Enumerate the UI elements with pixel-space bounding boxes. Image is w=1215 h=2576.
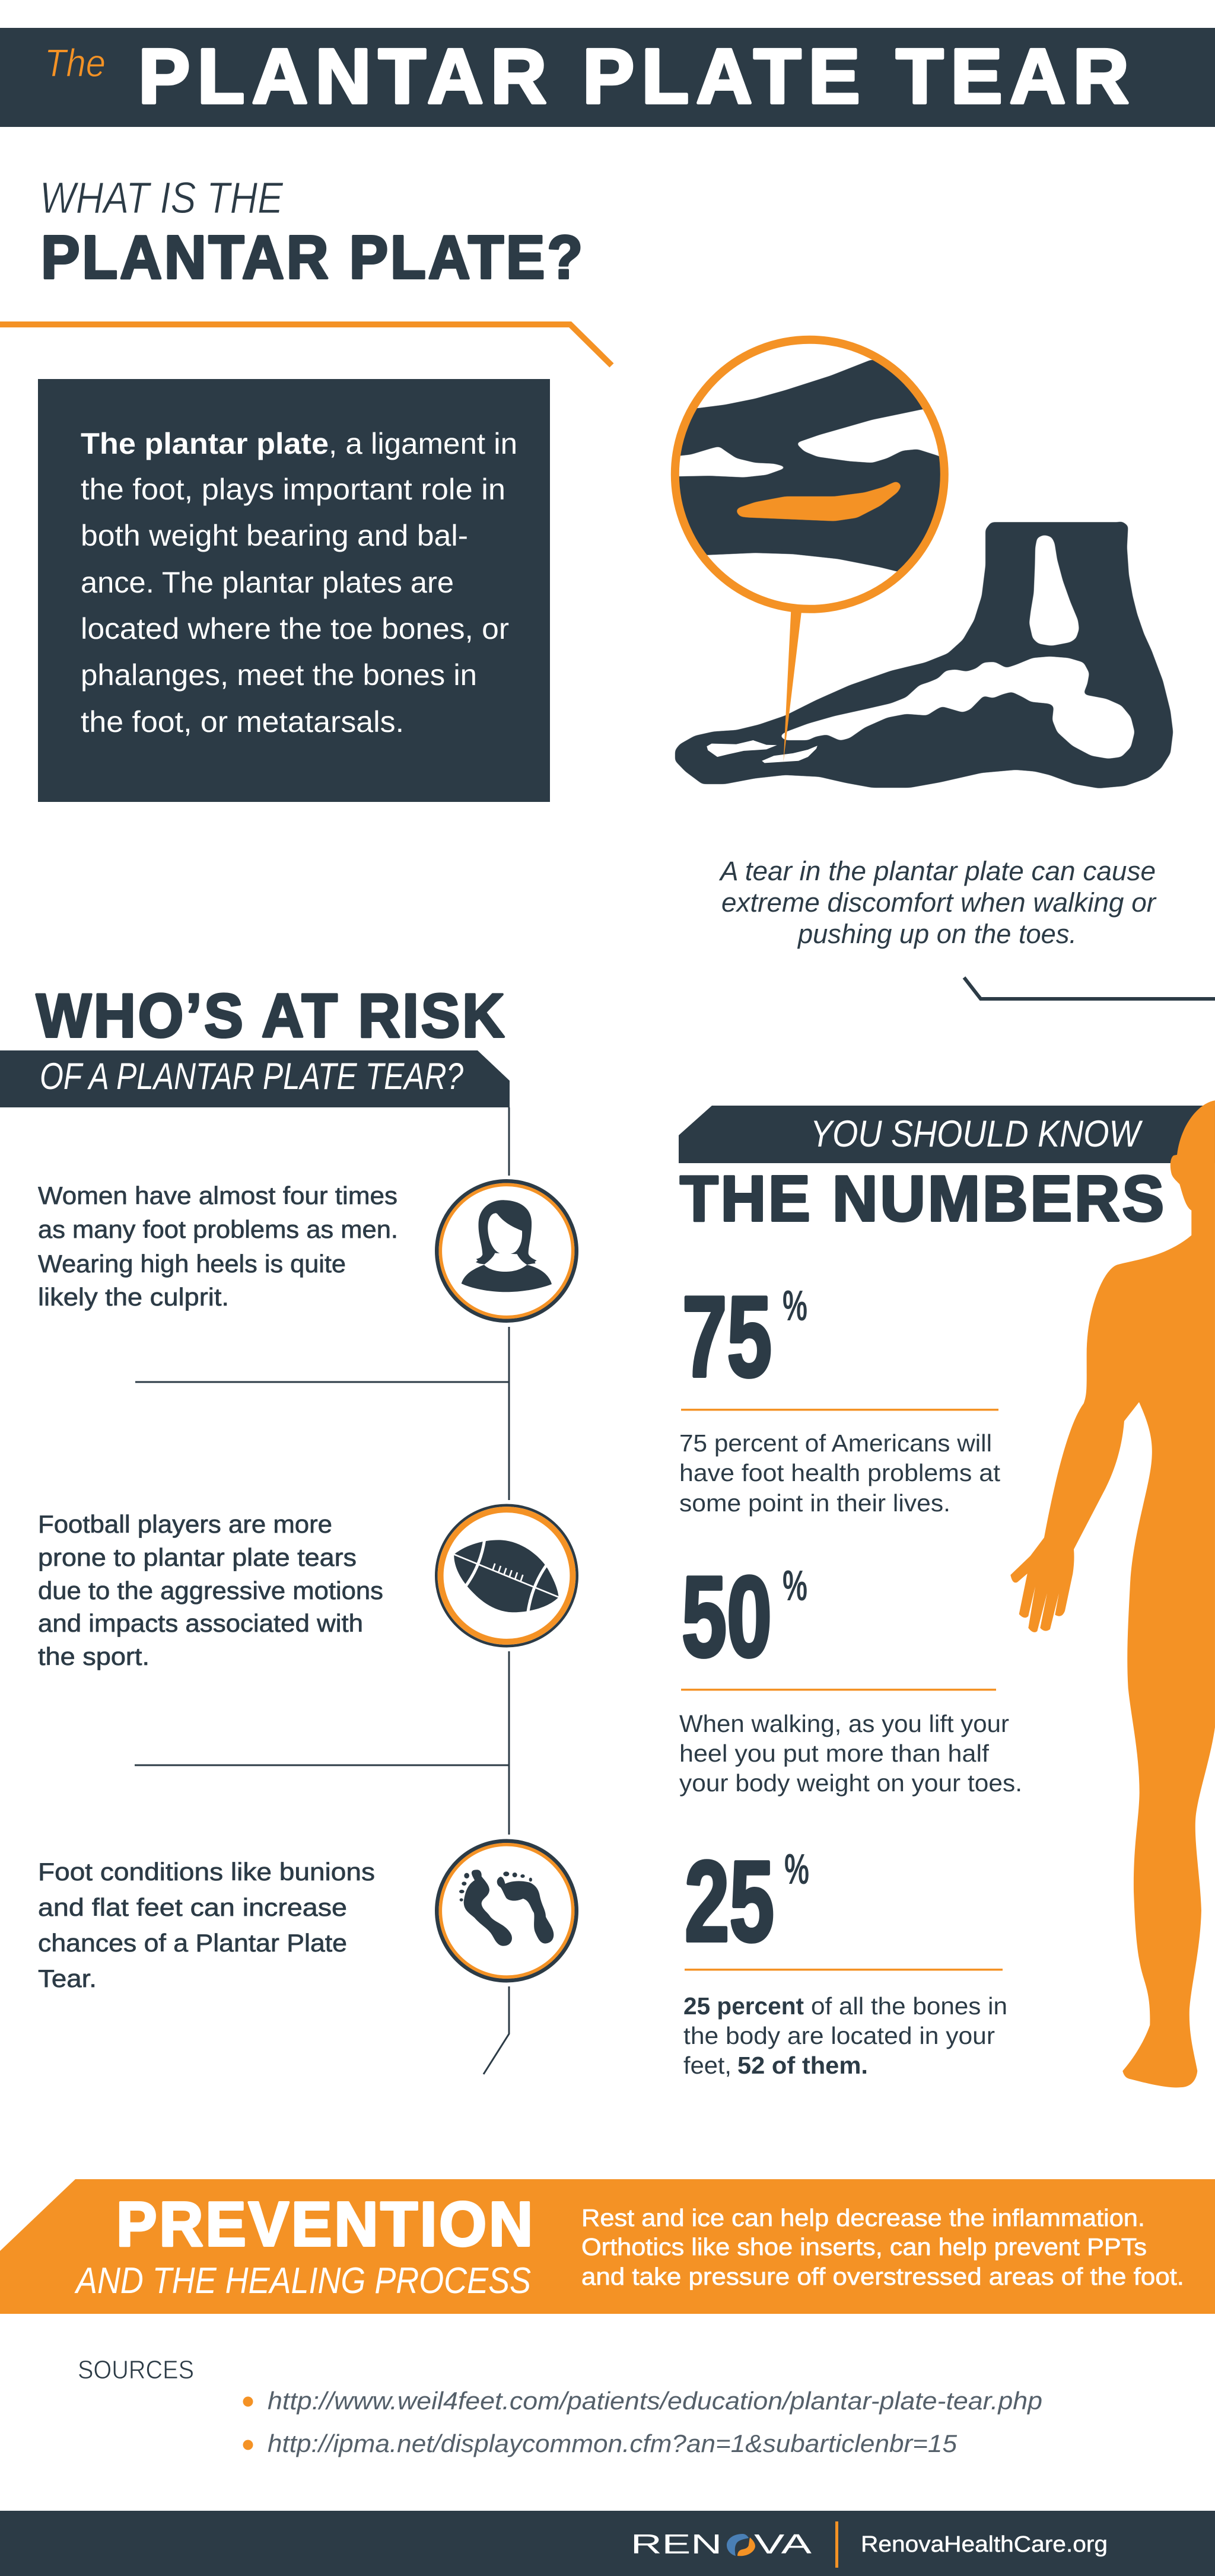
sources heading: SOURCES (78, 2355, 194, 2384)
stat: 50 percent: % (783, 1562, 807, 1610)
logo: Renova: REN (631, 2529, 722, 2559)
timeline connector (135, 1107, 509, 2074)
sources list (243, 2387, 1042, 2457)
subheading banner: you should know: YOU SHOULD KNOW (810, 1113, 1143, 1155)
stat: 25 percent: feet, (683, 2052, 731, 2079)
prevention text: Rest and ice can help decrease the inflammation. (581, 2204, 1145, 2231)
heading: the numbers: THE NUMBERS (680, 1163, 1166, 1235)
stat: 50 percent: When walking, as you lift your (679, 1710, 1009, 1737)
magnifier pointer (784, 611, 801, 762)
prevention subheading: AND THE HEALING PROCESS (74, 2260, 531, 2301)
risk text: football (38, 1510, 383, 1670)
risk text: football: prone to plantar plate tears (38, 1543, 357, 1571)
title prefix: The (44, 41, 106, 85)
magnifier ring (675, 340, 944, 609)
illustration: human body silhouette (1010, 1100, 1215, 2087)
definition text: ance. The plantar plates are (81, 566, 454, 599)
stat: 50 percent: your body weight on your toes. (679, 1769, 1022, 1797)
risk text: women: Women have almost four times (38, 1182, 397, 1209)
prevention heading: PREVENTION (116, 2189, 535, 2259)
risk text: women: likely the culprit. (38, 1283, 229, 1311)
stat: 75 percent (679, 1272, 1001, 1517)
stat: 25 percent: the body are located in your (683, 2022, 995, 2049)
definition text: both weight bearing and bal- (81, 519, 468, 552)
definition text: The plantar plate (81, 427, 329, 460)
heading: what is the plantar plate (40, 173, 585, 291)
heading: what is the plantar plate: WHAT IS THE (40, 173, 284, 222)
magnified joint (679, 359, 940, 572)
panel: prevention (0, 2179, 1215, 2314)
heading: who's at risk: WHO’S AT RISK (36, 982, 507, 1050)
risk text: football: the sport. (38, 1642, 150, 1670)
heading: what is the plantar plate: PLANTAR PLATE? (41, 223, 585, 291)
panel: plantar plate definition (38, 379, 550, 802)
foot silhouette (675, 521, 1173, 788)
sources list: http://ipma.net/displaycommon.cfm?an=1&subarticlenbr=15 (268, 2429, 958, 2457)
risk text: foot conditions: Foot conditions like bunions (38, 1858, 375, 1886)
risk text: foot conditions: Tear. (38, 1964, 97, 1992)
definition text: phalanges, meet the bones in (81, 658, 477, 692)
logo: Renova: VA (754, 2529, 812, 2559)
risk text: foot conditions: and flat feet can increase (38, 1893, 347, 1921)
title: PLANTAR PLATE TEAR (138, 32, 1129, 120)
stat: 50 percent: heel you put more than half (679, 1740, 990, 1767)
stat: 25 percent: 25 (685, 1837, 774, 1965)
stat: 50 percent (679, 1552, 1022, 1797)
definition text: , a ligament in (329, 427, 517, 460)
icon: woman (437, 1181, 577, 1321)
divider (835, 2521, 838, 2568)
caption: tear discomfort: A tear in the plantar plate can cause (718, 856, 1156, 886)
definition text (81, 427, 517, 738)
caption: tear discomfort: pushing up on the toes. (797, 919, 1077, 949)
caption: tear discomfort: extreme discomfort when walking or (721, 887, 1157, 918)
risk text: football: and impacts associated with (38, 1609, 363, 1637)
risk text: women: Wearing high heels is quite (38, 1250, 346, 1278)
icon: football (436, 1505, 577, 1646)
bone: heel and metatarsal (780, 657, 1134, 759)
stat: 75 percent: 75 (682, 1272, 772, 1400)
icon: footprints (437, 1841, 577, 1980)
website: RenovaHealthCare.org (861, 2532, 1108, 2557)
prevention text: Orthotics like shoe inserts, can help prevent PPTs (581, 2233, 1147, 2260)
stat: 25 percent: % (784, 1846, 809, 1893)
subheading banner: you should know (679, 1106, 1215, 1163)
bone: toe lower (762, 746, 818, 763)
stat: 25 percent: 25 percent (683, 1992, 804, 2020)
risk text: women: as many foot problems as men. (38, 1215, 398, 1243)
title banner (0, 28, 1215, 127)
logo: Renova (631, 2529, 812, 2559)
prevention text: and take pressure off overstressed areas of the foot. (581, 2263, 1184, 2290)
sources list: http://www.weil4feet.com/patients/education/plantar-plate-tear.php (268, 2387, 1042, 2415)
risk text: football: due to the aggressive motions (38, 1577, 383, 1604)
stat: 75 percent: 75 percent of Americans will (679, 1429, 992, 1457)
plantar plate highlight (736, 481, 902, 521)
stat: 75 percent: some point in their lives. (679, 1489, 950, 1517)
subheading banner: of a plantar plate tear (0, 1050, 510, 1107)
definition text: located where the toe bones, or (81, 612, 509, 645)
caption: tear discomfort (718, 856, 1157, 949)
illustration: foot x-ray with magnifier (668, 340, 1173, 788)
footer (0, 2511, 1215, 2576)
risk text: women (38, 1182, 398, 1311)
risk text: foot conditions: chances of a Plantar Plate (38, 1929, 347, 1957)
stat: 25 percent: 52 of them. (737, 2052, 868, 2079)
bone: toe upper (707, 740, 777, 757)
stat: 75 percent: % (783, 1282, 807, 1330)
subheading banner: of a plantar plate tear: OF A PLANTAR PLATE TEAR? (40, 1056, 463, 1097)
stat: 25 percent (683, 1837, 1007, 2079)
prevention text (581, 2204, 1184, 2290)
stat: 75 percent: have foot health problems at (679, 1459, 1001, 1486)
stat: 25 percent: of all the bones in (811, 1992, 1007, 2020)
definition text: the foot, or metatarsals. (81, 705, 404, 738)
bone: tibia (1029, 535, 1079, 646)
risk text: football: Football players are more (38, 1510, 332, 1538)
stat: 50 percent: 50 (682, 1552, 772, 1680)
risk text: foot conditions (38, 1858, 375, 1992)
definition text: the foot, plays important role in (81, 473, 505, 506)
